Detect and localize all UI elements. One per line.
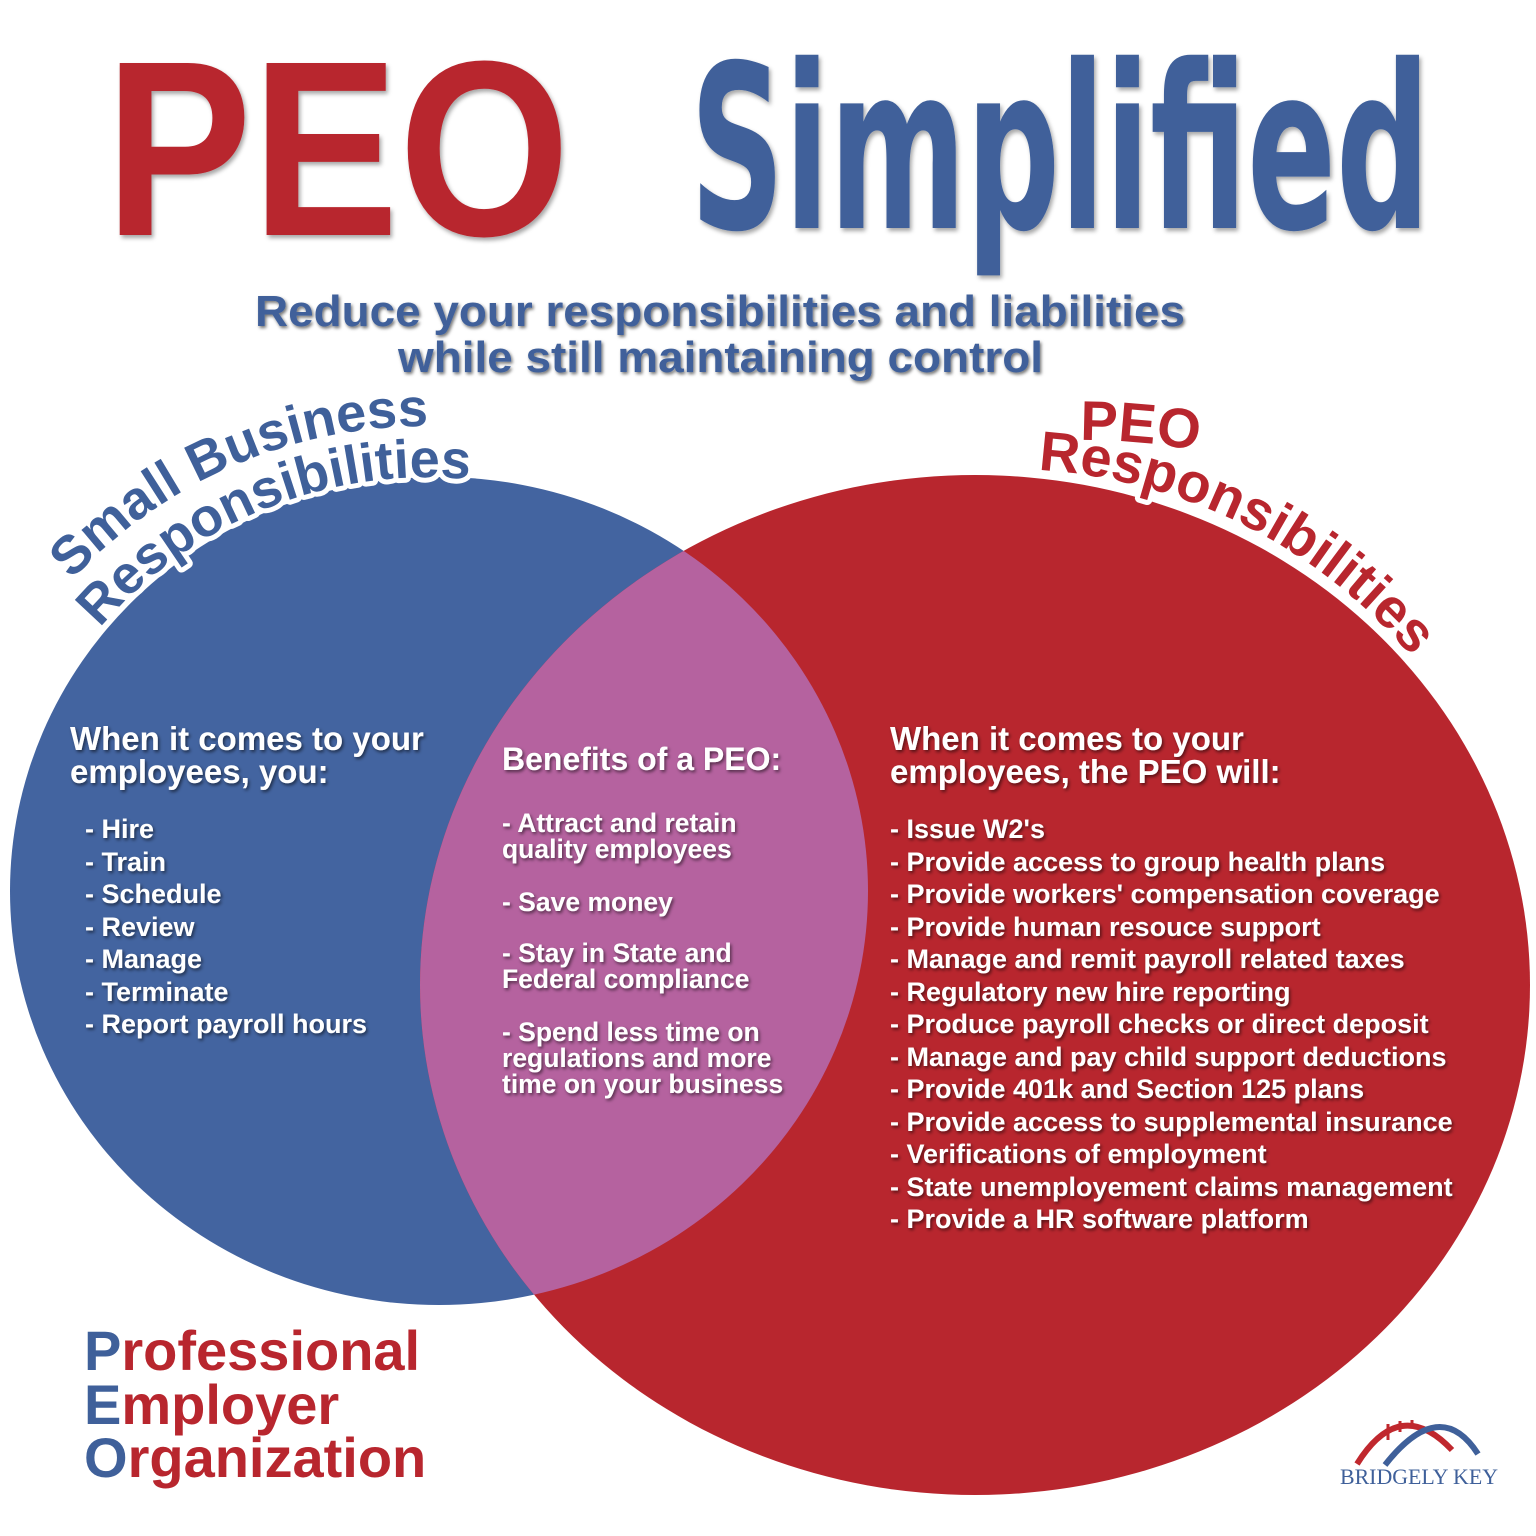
text: benefits: Federal compliance <box>502 964 749 994</box>
text: PEO list: - Regulatory new hire reporting <box>890 977 1291 1007</box>
text: benefits: time on your business <box>502 1069 783 1099</box>
text: benefits: - Attract and retain <box>502 808 737 838</box>
text: small business list: - Report payroll hours <box>85 1009 367 1039</box>
text: small business list: - Review <box>85 912 196 942</box>
text: Professional Employer Organization: Professional <box>84 1319 420 1382</box>
text: PEO list: - Provide workers' compensation coverage <box>890 879 1440 909</box>
text: PEO list: - State unemployement claims management <box>890 1172 1453 1202</box>
text: benefits: - Save money <box>502 887 673 917</box>
text: benefits: quality employees <box>502 834 732 864</box>
text: PEO list: - Manage and remit payroll related taxes <box>890 944 1405 974</box>
text: PEO list: - Provide a HR software platform <box>890 1204 1309 1234</box>
text: small business list: - Manage <box>85 944 202 974</box>
logo: Bridgely Key: BRIDGELY KEY <box>1340 1464 1498 1489</box>
text: benefits: Benefits of a PEO: <box>502 741 781 777</box>
text: small business list: - Terminate <box>85 977 229 1007</box>
text: PEO list: - Provide access to supplemental insurance <box>890 1107 1453 1137</box>
subtitle: while still maintaining control <box>397 333 1043 382</box>
text: PEO list: - Provide 401k and Section 125 plans <box>890 1074 1364 1104</box>
text: PEO list: employees, the PEO will: <box>890 753 1281 790</box>
venn diagram <box>10 475 1530 1495</box>
text: PEO list: - Verifications of employment <box>890 1139 1267 1169</box>
subtitle: Reduce your responsibilities and liabilities <box>255 287 1185 336</box>
text: small business list: - Hire <box>85 814 154 844</box>
text: PEO list: - Manage and pay child support deductions <box>890 1042 1447 1072</box>
text: Professional Employer Organization: Employer <box>84 1373 339 1436</box>
label: PEO Responsibilities: Responsibilities <box>1042 432 1428 652</box>
overlap <box>420 551 868 1294</box>
text: PEO list: - Provide access to group health plans <box>890 847 1385 877</box>
label: Small Business Responsibilities: Responsibilities <box>74 438 470 626</box>
label: PEO Responsibilities: PEO <box>1084 401 1199 448</box>
text: small business list: - Schedule <box>85 879 222 909</box>
text: benefits: - Stay in State and <box>502 938 732 968</box>
text: Professional Employer Organization: Organization <box>84 1426 426 1489</box>
text: small business list: - Train <box>85 847 166 877</box>
text: benefits <box>502 741 783 1099</box>
text: Professional Employer Organization <box>84 1319 426 1489</box>
subtitle <box>255 287 1185 382</box>
text: benefits: regulations and more <box>502 1043 771 1073</box>
label: Small Business Responsibilities: Small Business <box>52 397 426 574</box>
logo: Bridgely Key <box>1340 1420 1498 1489</box>
text: small business list <box>70 720 424 1039</box>
text: PEO list <box>890 720 1453 1234</box>
text: PEO list: - Issue W2's <box>890 814 1045 844</box>
text: PEO list: - Provide human resouce support <box>890 912 1321 942</box>
text: small business list: When it comes to your <box>70 720 424 757</box>
text: PEO list: When it comes to your <box>890 720 1244 757</box>
title: PEO: PEO <box>105 9 570 288</box>
circle: small business <box>10 477 868 1305</box>
circle: PEO <box>420 475 1530 1495</box>
text: PEO list: - Produce payroll checks or direct deposit <box>890 1009 1429 1039</box>
text: benefits: - Spend less time on <box>502 1017 760 1047</box>
text: small business list: employees, you: <box>70 753 329 790</box>
